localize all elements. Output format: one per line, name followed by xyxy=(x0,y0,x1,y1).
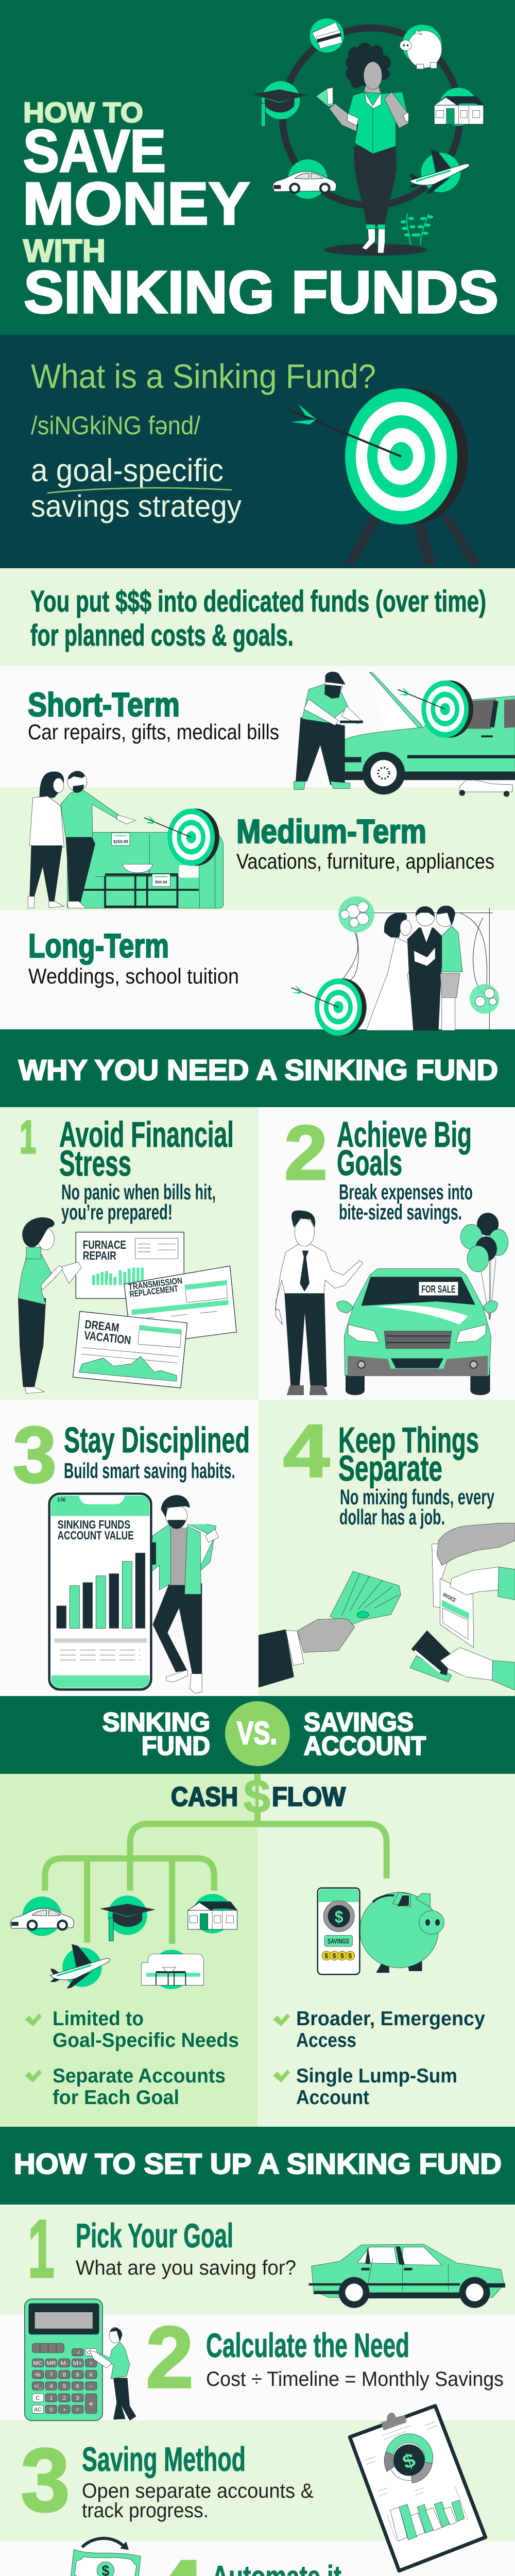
bar chart xyxy=(390,2500,465,2541)
illustration: mechanic repairing car xyxy=(294,672,515,797)
donut chart: $ xyxy=(400,2449,418,2473)
definition text block: savings strategy xyxy=(31,489,242,523)
illustration: couple choosing couch xyxy=(28,771,224,908)
comparison bullets: sinking fund xyxy=(25,2008,239,2109)
reason 3 text: Stay Disciplined xyxy=(64,1420,250,1460)
icon: credit cards xyxy=(310,19,344,53)
cash flow heading: CASH xyxy=(171,1782,238,1812)
comparison bullets: savings account: Single Lump-Sum xyxy=(296,2065,457,2087)
reason 1 text: Avoid Financial xyxy=(59,1114,234,1155)
versus header: VS. xyxy=(237,1716,277,1751)
icon: piggy bank xyxy=(400,25,442,69)
step 1 text: Pick Your Goal xyxy=(76,2216,233,2255)
calculator labels: 8 xyxy=(63,2372,66,2378)
calculator labels: 2 xyxy=(63,2395,66,2401)
bill: furnace repair xyxy=(76,1232,184,1298)
reason 2 text: 2 xyxy=(284,1109,328,1196)
plant xyxy=(400,214,433,245)
icon: car xyxy=(272,159,336,199)
icon: graduation cap xyxy=(100,1895,156,1941)
balloons xyxy=(460,1213,508,1319)
calculator labels: MC xyxy=(33,2361,42,2367)
icon: house xyxy=(188,1894,237,1934)
comparison bullets: sinking fund: Goal-Specific Needs xyxy=(53,2029,239,2052)
short-term text: Car repairs, gifts, medical bills xyxy=(28,720,279,744)
piggy bank xyxy=(359,1892,444,1973)
summary text: for planned costs & goals. xyxy=(30,619,294,652)
comparison bullets: sinking fund: Limited to xyxy=(53,2008,144,2030)
phone app: $ xyxy=(340,1952,344,1959)
dollar bill xyxy=(70,2549,141,2576)
panel: summary strip xyxy=(0,568,515,666)
phone: 3:56 xyxy=(58,1497,65,1503)
panel: reason 4 card xyxy=(259,1400,515,1696)
icon: check xyxy=(25,2070,42,2082)
bill: dream vacation xyxy=(73,1311,187,1388)
versus header: FUND xyxy=(142,1731,210,1760)
calculator labels: C xyxy=(36,2395,40,2401)
coins xyxy=(322,1951,355,1960)
calculator labels: 5 xyxy=(63,2383,66,2389)
calculator labels: + xyxy=(89,2399,94,2409)
bill: transmission replacement: TRANSMISSION xyxy=(128,1275,183,1292)
short-term text: Short-Term xyxy=(28,686,180,723)
car xyxy=(341,672,515,797)
target xyxy=(291,978,367,1036)
definition text block: /siNGkiNG fənd/ xyxy=(31,411,200,440)
hero illustration: woman surrounded by savings goals xyxy=(252,19,484,256)
panel: step 1 band xyxy=(0,2205,515,2314)
panel: savings account column xyxy=(258,1774,515,2127)
panel: reason 3 card xyxy=(0,1400,259,1696)
calculator labels: = xyxy=(76,2407,79,2413)
illustration: calendar with recurring transfer xyxy=(10,2538,141,2576)
calculator labels: • xyxy=(63,2407,65,2413)
calculator labels: 9 xyxy=(76,2372,79,2378)
car: FOR SALE xyxy=(421,1284,456,1295)
step 2 text: Cost ÷ Timeline = Monthly Savings xyxy=(206,2368,504,2391)
hands xyxy=(410,1523,515,1690)
panel: why heading band xyxy=(0,1029,515,1107)
reason 1 text: you’re prepared! xyxy=(61,1200,173,1224)
cash flow heading: $ xyxy=(244,1770,270,1823)
woman figure xyxy=(316,43,408,253)
bill: dream vacation: VACATION xyxy=(83,1329,132,1347)
bride xyxy=(366,912,420,1030)
versus header xyxy=(102,1701,426,1766)
bill: transmission replacement xyxy=(124,1266,236,1346)
target xyxy=(398,681,473,738)
title: WITH xyxy=(23,233,106,269)
panel: reason 2 card xyxy=(259,1107,515,1400)
reason 1 text: 1 xyxy=(20,1112,36,1163)
illustration: hands with cash, invoice and cards xyxy=(259,1523,515,1690)
step 3 text: Open separate accounts & xyxy=(82,2480,314,2502)
long-term text: Long-Term xyxy=(28,927,169,964)
money fan in hand xyxy=(259,1571,401,1688)
panel: medium-term band xyxy=(0,787,515,910)
medium-term text xyxy=(236,812,494,873)
step 1 text: 1 xyxy=(28,2202,55,2295)
groom xyxy=(436,906,462,1030)
illustration: calculator with person xyxy=(25,2299,136,2420)
phone: SINKING FUNDS xyxy=(58,1518,130,1531)
phone app: $ xyxy=(324,1952,328,1959)
salesman xyxy=(275,1210,363,1395)
cash flow tree xyxy=(45,1774,387,1944)
comparison bullets: savings account xyxy=(273,2008,485,2109)
panel: short-term band xyxy=(0,666,515,787)
arch xyxy=(341,908,493,1030)
panel: definition background xyxy=(0,335,515,568)
icon: airplane xyxy=(50,1944,110,1989)
donut chart xyxy=(384,2434,433,2483)
step 3 text: track progress. xyxy=(82,2499,209,2522)
title: SINKING FUNDS xyxy=(24,259,499,326)
versus header: SINKING xyxy=(102,1707,210,1737)
goal ring xyxy=(283,28,460,206)
panel: sinking fund column xyxy=(0,1774,258,2127)
title: SAVE xyxy=(23,117,166,184)
calculator labels: – xyxy=(90,2383,93,2389)
transfer arrows xyxy=(81,2538,129,2576)
icon: house xyxy=(434,88,484,126)
woman xyxy=(28,771,64,908)
calculator labels: ÷ xyxy=(90,2361,93,2367)
reason 1 text xyxy=(20,1112,234,1224)
panel: step 2 band xyxy=(0,2314,515,2420)
officiant xyxy=(407,906,442,1030)
ground shadow xyxy=(324,244,427,256)
bar chart xyxy=(57,1553,145,1629)
medium-term text: Medium-Term xyxy=(236,812,426,850)
step 3 text: Saving Method xyxy=(82,2440,246,2478)
illustration: salesman with car for sale xyxy=(275,1210,508,1395)
clip xyxy=(381,2413,407,2431)
comparison bullets: savings account: Broader, Emergency xyxy=(296,2008,485,2030)
calculator labels: 1 xyxy=(49,2395,53,2401)
heading: how to set up a sinking fund: HOW TO SET UP A SINKING FUND xyxy=(14,2147,502,2180)
title xyxy=(23,96,499,326)
bill: furnace repair: REPAIR xyxy=(83,1249,116,1262)
phone app xyxy=(318,1888,359,1974)
calculator keys xyxy=(32,2359,97,2413)
calculator: ON xyxy=(87,2350,96,2355)
step 3 text: 3 xyxy=(21,2430,70,2531)
title: MONEY xyxy=(23,170,250,237)
icon: check xyxy=(273,2013,290,2026)
definition text block: a goal-specific xyxy=(31,453,224,488)
summary text xyxy=(30,585,486,652)
flowers xyxy=(338,896,499,1014)
reason 1 text: No panic when bills hit, xyxy=(61,1180,216,1204)
calculator labels: 3 xyxy=(76,2395,79,2401)
calculator labels xyxy=(33,2361,94,2413)
car xyxy=(337,1268,497,1395)
phone app: $ xyxy=(348,1952,352,1959)
phone app: $ xyxy=(335,1908,344,1927)
target xyxy=(144,808,219,866)
calculator labels: 4 xyxy=(49,2383,53,2389)
icon: car xyxy=(10,1896,74,1936)
man xyxy=(146,1495,218,1693)
versus header: SAVINGS xyxy=(304,1707,414,1737)
panel: versus band xyxy=(0,1696,515,1774)
icon: check xyxy=(273,2070,290,2082)
reason 1 text: Stress xyxy=(59,1143,131,1183)
cash flow heading xyxy=(171,1770,346,1823)
bill: furnace repair: FURNACE xyxy=(83,1238,126,1251)
reason 3 text xyxy=(13,1410,250,1499)
illustration: clipboard with charts xyxy=(350,2406,486,2571)
panel: step 4 band xyxy=(0,2541,515,2576)
reason 2 text xyxy=(284,1109,473,1224)
calculator labels: M- xyxy=(60,2361,68,2367)
calculator labels: 6 xyxy=(76,2383,79,2389)
calculator labels: 7 xyxy=(49,2372,53,2378)
reason 3 text: Build smart saving habits. xyxy=(64,1459,235,1483)
bill: transmission replacement: REPLACEMENT xyxy=(129,1283,179,1299)
heading: why you need a sinking fund: WHY YOU NEED A SINKING FUND xyxy=(19,1054,498,1086)
phone app: $ xyxy=(332,1952,336,1959)
calculator labels: X xyxy=(89,2372,93,2378)
step 1 text xyxy=(28,2202,296,2295)
definition text block xyxy=(31,357,376,523)
versus header: ACCOUNT xyxy=(304,1731,426,1760)
reason 4 text xyxy=(283,1409,494,1529)
panel: setup heading band xyxy=(0,2127,515,2205)
icon: couch xyxy=(141,1950,203,1989)
panel: long-term band xyxy=(0,910,515,1029)
illustration: green sedan xyxy=(309,2244,505,2308)
step 4 text xyxy=(153,2543,490,2576)
comparison bullets: sinking fund: for Each Goal xyxy=(53,2087,179,2109)
cash flow heading: FLOW xyxy=(272,1782,346,1812)
couch and table: $250.99 xyxy=(113,839,128,844)
short-term text xyxy=(28,686,279,744)
mechanic xyxy=(294,672,363,790)
reason 3 text: 3 xyxy=(13,1410,57,1499)
step 1 text: What are you saving for? xyxy=(76,2257,296,2279)
icon: check xyxy=(25,2013,42,2026)
panel: reason 1 card xyxy=(0,1107,259,1400)
long-term text xyxy=(28,927,239,988)
calculator labels: % xyxy=(36,2372,41,2378)
man xyxy=(61,771,135,908)
calculator labels: MR xyxy=(47,2361,56,2367)
couch and table: $50.99 xyxy=(155,879,167,884)
long-term text: Weddings, school tuition xyxy=(28,964,239,988)
bill: dream vacation: DREAM xyxy=(84,1317,120,1334)
calculator labels: +/_ xyxy=(34,2383,42,2389)
couch and table xyxy=(67,832,224,908)
comparison bullets: savings account: Account xyxy=(296,2087,369,2109)
illustration: wedding ceremony xyxy=(291,896,499,1036)
step 2 text: 2 xyxy=(146,2309,194,2406)
icon: graduation cap xyxy=(252,81,307,127)
person xyxy=(89,2327,136,2420)
panel: header background xyxy=(0,0,515,335)
step 2 text: Calculate the Need xyxy=(206,2326,409,2364)
step 2 text xyxy=(146,2309,504,2406)
calculator: √ xyxy=(77,2350,80,2356)
icon: airplane xyxy=(409,149,470,194)
comparison bullets: savings account: Access xyxy=(296,2029,356,2052)
woman xyxy=(18,1217,81,1394)
phone: ACCOUNT VALUE xyxy=(58,1529,134,1542)
definition text block: What is a Sinking Fund? xyxy=(31,357,376,395)
step 3 text xyxy=(21,2430,314,2531)
vs badge xyxy=(225,1701,290,1766)
reason 4 text: Separate xyxy=(338,1448,442,1488)
calculator labels: M+ xyxy=(73,2361,82,2367)
calculator labels: AC xyxy=(34,2407,42,2413)
invoice: INVOICE xyxy=(442,1592,457,1604)
phone app: SAVINGS xyxy=(328,1937,349,1945)
goal icons xyxy=(10,1894,237,1989)
comparison bullets: sinking fund: Separate Accounts xyxy=(53,2065,226,2087)
calculator labels: 0 xyxy=(49,2407,53,2413)
reason 4 text: dollar has a job. xyxy=(339,1505,445,1529)
icon: target with arrow on stand xyxy=(289,388,481,565)
reason 2 text: Goals xyxy=(337,1143,402,1183)
illustration: woman reviewing savings goals xyxy=(18,1217,236,1394)
calculator xyxy=(25,2299,102,2420)
illustration: sinking funds phone chart with man xyxy=(49,1494,218,1693)
panel: step 3 band xyxy=(0,2420,515,2541)
phone xyxy=(49,1494,151,1689)
invoice xyxy=(432,1544,474,1648)
reason 4 text: 4 xyxy=(283,1409,330,1493)
illustration: phone savings app and piggy bank xyxy=(318,1888,444,1974)
title: HOW TO xyxy=(23,96,143,128)
